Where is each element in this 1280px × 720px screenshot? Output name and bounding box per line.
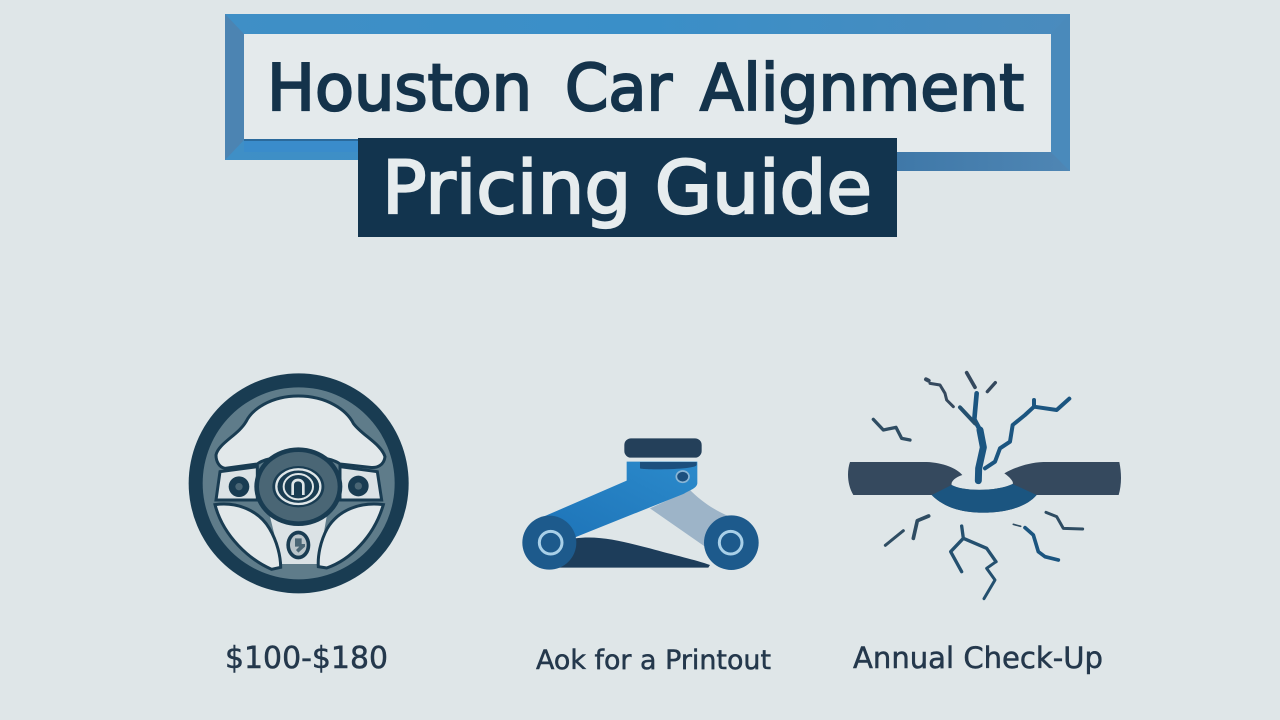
heading panel: Pricing Guide: Pricing Guide	[382, 146, 872, 231]
label: ask for a printout: Aok for a Printout	[536, 645, 771, 676]
heading: Houston Car Alignment: Houston	[267, 52, 532, 126]
title frame	[225, 14, 1070, 171]
icon: steering wheel	[189, 373, 409, 593]
label: annual check-up: Annual Check-Up	[853, 641, 1103, 675]
heading: Houston Car Alignment: Alignment	[700, 52, 1024, 126]
heading: Houston Car Alignment: Car	[565, 52, 673, 126]
label: price range: $100-$180	[225, 641, 388, 676]
icon: car jack	[522, 438, 759, 570]
icon: pothole with cracks	[848, 373, 1121, 599]
heading: Houston Car Alignment	[267, 52, 1024, 126]
